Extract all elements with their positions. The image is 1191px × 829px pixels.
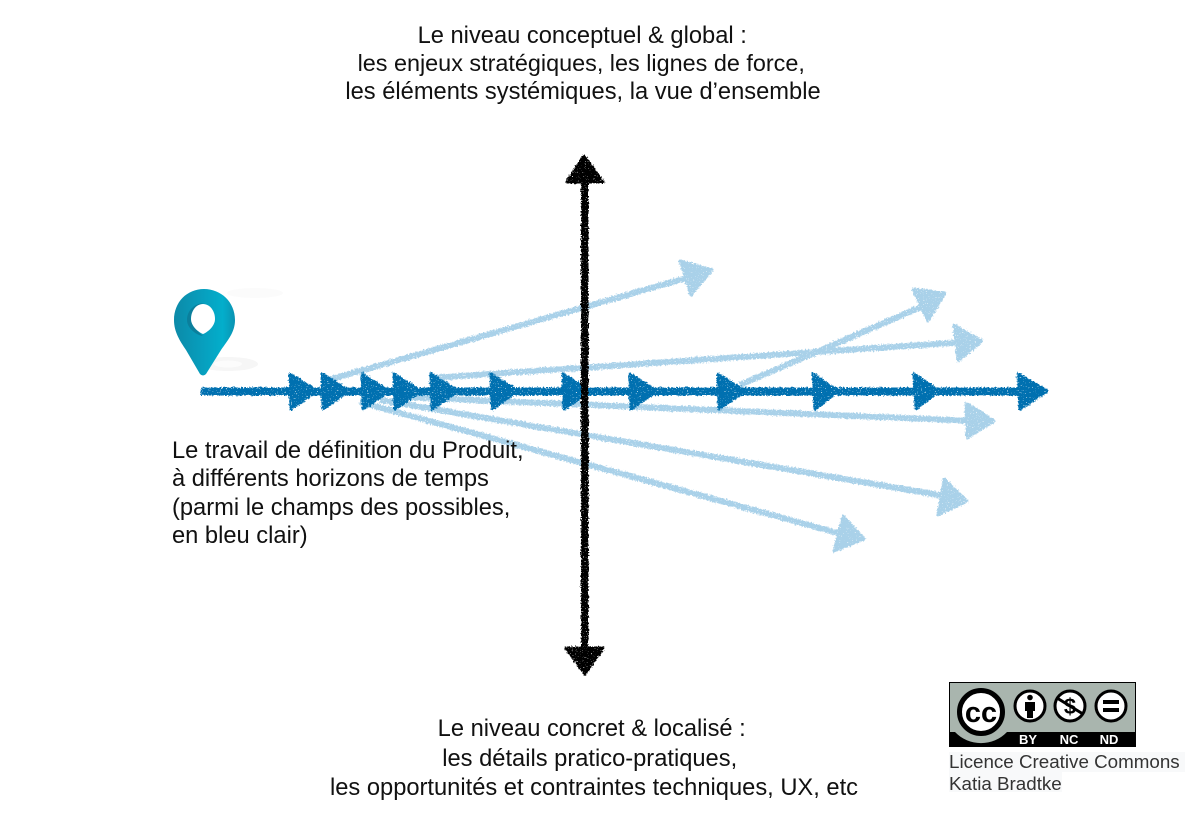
- icon: Creative Commons badge: cc: [965, 697, 997, 729]
- heading: conceptual level: Le niveau conceptuel & global :: [418, 23, 747, 49]
- dark blue timeline arrow: [201, 374, 1047, 409]
- heading: concrete level: les opportunités et contraintes techniques, UX, etc: [330, 775, 858, 801]
- heading: concrete level: Le niveau concret & localisé :: [438, 716, 746, 742]
- light blue possible-paths arrows: [325, 261, 994, 551]
- icon: location pin: [174, 288, 283, 376]
- heading: concrete level: les détails pratico-pratiques,: [442, 746, 737, 772]
- text: product definition: (parmi le champs des possibles,: [172, 495, 510, 521]
- text: product definition: en bleu clair): [172, 523, 308, 549]
- icon: Creative Commons badge: NC: [1060, 732, 1079, 747]
- icon: Creative Commons badge: $: [1064, 694, 1076, 719]
- text: licence credit: Licence Creative Commons: [949, 751, 1180, 772]
- icon: Creative Commons badge: BY: [1019, 732, 1037, 747]
- heading: conceptual level: les enjeux stratégiques, les lignes de force,: [358, 50, 805, 76]
- text: product definition: à différents horizons de temps: [172, 466, 489, 492]
- icon: Creative Commons badge: ND: [1100, 732, 1118, 747]
- icon: Creative Commons badge: [949, 682, 1136, 747]
- text: licence credit: [949, 751, 1185, 794]
- vertical black double arrow: [566, 156, 603, 674]
- heading: conceptual level: les éléments systémiques, la vue d’ensemble: [345, 79, 821, 105]
- text: licence credit: Katia Bradtke: [949, 773, 1062, 794]
- text: product definition: Le travail de définition du Produit,: [172, 438, 524, 464]
